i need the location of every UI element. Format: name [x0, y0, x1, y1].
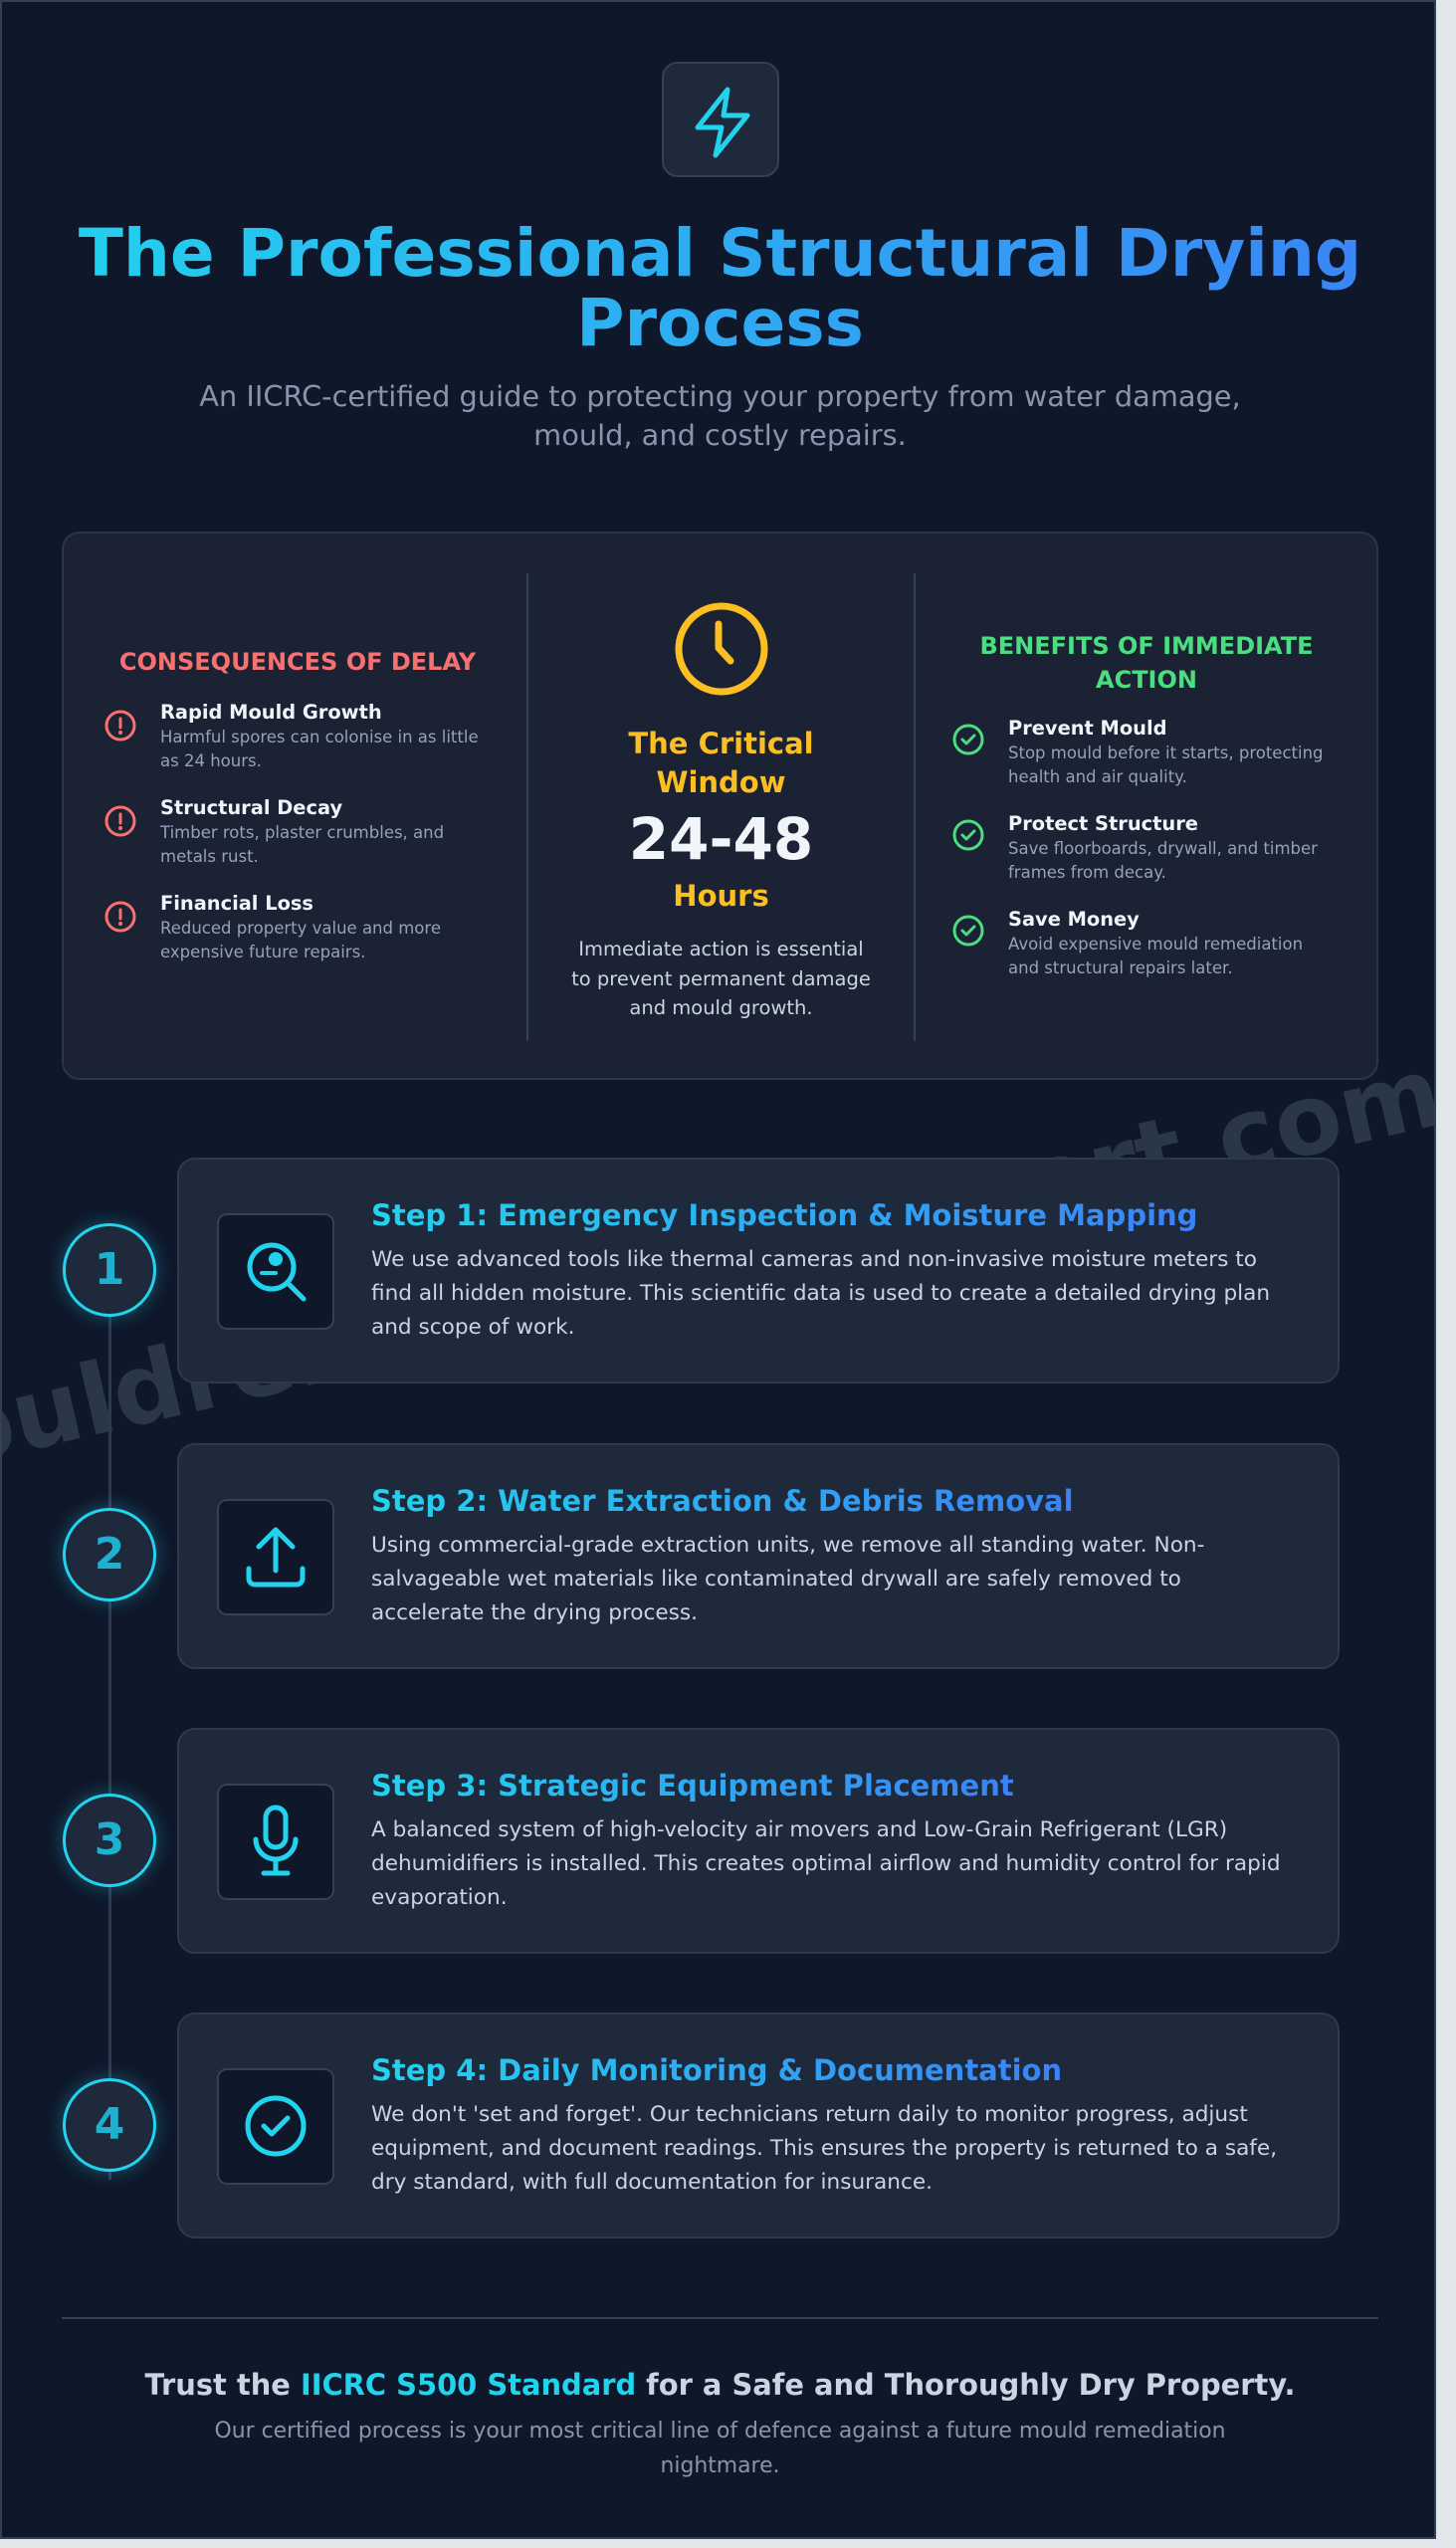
- step 2: [177, 1443, 1340, 1669]
- step 4: We don't 'set and forget'. Our technicians return daily to monitor progress, adjust equipment, and document readings. This ensures the property is returned to a safe, dry standard, with full documentation for insurance.: [371, 2102, 1277, 2195]
- center: critical window: 24-48: [629, 805, 813, 873]
- item: financial loss: [105, 892, 441, 961]
- step 1: We use advanced tools like thermal cameras and non-invasive moisture meters to find all hidden moisture. This scientific data is used to create a detailed drying plan and scope of work.: [371, 1247, 1270, 1340]
- center: critical window: [571, 603, 871, 1019]
- item: protect structure: Save floorboards, drywall, and timber frames from decay.: [1008, 839, 1318, 882]
- subtitle: An IICRC-certified guide to protecting your property from water damage, mould, and costly repairs.: [199, 379, 1241, 452]
- title: The Professional Structural Drying: [79, 215, 1361, 292]
- divider: [62, 2317, 1378, 2319]
- item: structural decay: Structural Decay: [160, 796, 342, 819]
- item: rapid mould growth: Rapid Mould Growth: [160, 701, 382, 724]
- step number 4: 4: [95, 2099, 124, 2150]
- step number 2: 2: [95, 1529, 124, 1580]
- panel: critical window: [62, 531, 1378, 1080]
- step 4: [177, 2013, 1340, 2238]
- item: save money: [953, 908, 1303, 977]
- step 1: Step 1: Emergency Inspection & Moisture Mapping: [371, 1198, 1197, 1232]
- center: critical window: Window: [656, 765, 786, 799]
- step number 1: [63, 1223, 156, 1317]
- item: prevent mould: Stop mould before it starts, protecting health and air quality.: [1008, 743, 1324, 786]
- item: financial loss: Reduced property value and more expensive future repairs.: [160, 919, 441, 961]
- step number 1: 1: [95, 1244, 124, 1295]
- step 3: A balanced system of high-velocity air movers and Low-Grain Refrigerant (LGR) dehumidifiers is installed. This creates optimal airflow and humidity control for rapid evaporation.: [371, 1817, 1281, 1910]
- step 1: [177, 1158, 1340, 1383]
- step 3: Step 3: Strategic Equipment Placement: [371, 1769, 1014, 1803]
- icon: lightning: [662, 62, 779, 177]
- title: Process: [576, 285, 864, 361]
- step number 2: [63, 1508, 156, 1601]
- icon: check circle: [217, 2068, 334, 2185]
- footer headline: Trust the IICRC S500 Standard for a Safe and Thoroughly Dry Property.: [145, 2368, 1296, 2402]
- footer text: Our certified process is your most critical line of defence against a future mould remediation nightmare.: [215, 2419, 1226, 2478]
- step 3: [177, 1728, 1340, 1954]
- item: structural decay: [105, 796, 444, 866]
- step 4: Step 4: Daily Monitoring & Documentation: [371, 2053, 1062, 2087]
- heading: benefits: ACTION: [1096, 666, 1197, 694]
- timeline line: [108, 1224, 111, 2180]
- item: prevent mould: [953, 717, 1324, 786]
- heading: consequences: CONSEQUENCES OF DELAY: [119, 648, 476, 676]
- item: structural decay: Timber rots, plaster crumbles, and metals rust.: [160, 823, 444, 866]
- heading: benefits: BENEFITS OF IMMEDIATE: [979, 632, 1314, 660]
- step 2: Step 2: Water Extraction & Debris Removal: [371, 1484, 1074, 1518]
- item: protect structure: Protect Structure: [1008, 812, 1198, 835]
- item: rapid mould growth: [105, 701, 479, 770]
- step number 3: 3: [95, 1814, 124, 1865]
- item: save money: Avoid expensive mould remediation and structural repairs later.: [1008, 935, 1303, 977]
- heading: benefits: [979, 632, 1314, 694]
- step number 3: [63, 1794, 156, 1887]
- item: prevent mould: Prevent Mould: [1008, 717, 1166, 740]
- icon: clock: [675, 603, 768, 695]
- center: critical window: Immediate action is essential to prevent permanent damage and mould growth.: [571, 938, 871, 1019]
- item: protect structure: [953, 812, 1318, 882]
- icon: microphone: [217, 1784, 334, 1900]
- item: financial loss: Financial Loss: [160, 892, 313, 915]
- item: rapid mould growth: Harmful spores can colonise in as little as 24 hours.: [160, 728, 479, 770]
- step 2: Using commercial-grade extraction units, we remove all standing water. Non-salvageable wet materials like contaminated drywall are safely removed to accelerate the drying process.: [371, 1533, 1204, 1625]
- icon: magnifier: [217, 1213, 334, 1330]
- item: save money: Save Money: [1008, 908, 1140, 931]
- icon: upload: [217, 1499, 334, 1615]
- step number 4: [63, 2078, 156, 2172]
- title: [2, 219, 1438, 358]
- center: critical window: The Critical: [628, 727, 814, 760]
- center: critical window: Hours: [673, 879, 769, 913]
